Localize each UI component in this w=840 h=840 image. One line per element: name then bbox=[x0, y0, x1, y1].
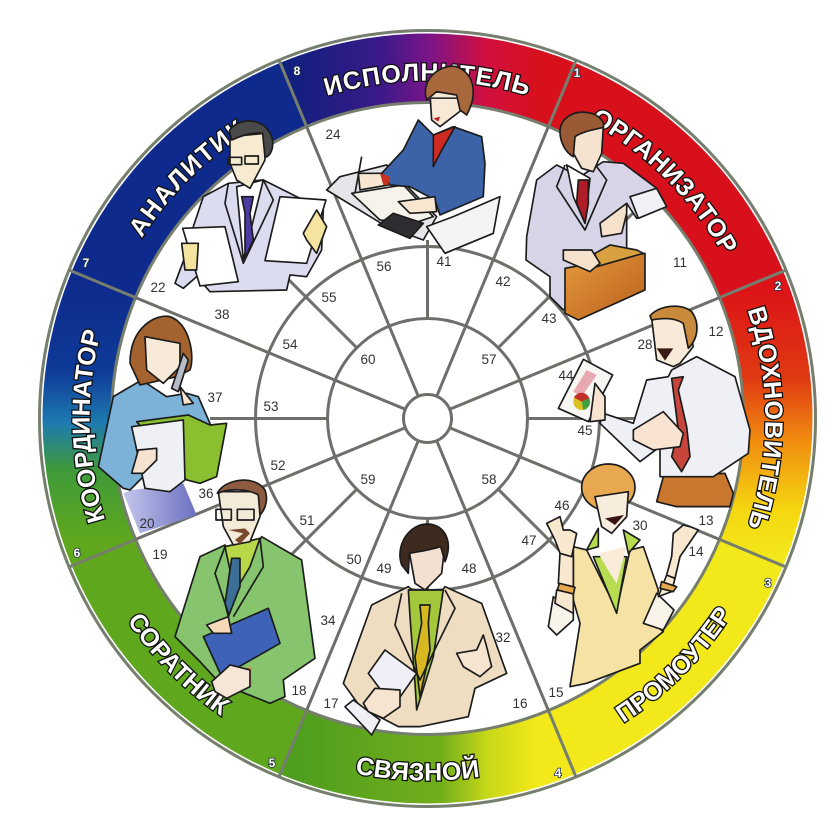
figure: woman at desk in blue jacket bbox=[327, 66, 500, 253]
cell numbers: 20 bbox=[139, 516, 155, 531]
cell numbers: 32 bbox=[495, 630, 511, 645]
segment: Аналитик bbox=[72, 63, 307, 298]
role title: ПРОМОУТЕР: ПРОМОУТЕР bbox=[613, 606, 728, 724]
cell numbers: 45 bbox=[577, 423, 593, 438]
cell numbers: 47 bbox=[521, 533, 537, 548]
segment numbers 1 to 8: 2 bbox=[775, 279, 782, 293]
cell numbers: 41 bbox=[436, 254, 452, 269]
target grid: circles and spokes bbox=[136, 127, 719, 710]
cell numbers: 36 bbox=[198, 486, 214, 501]
figure: woman with raised hands in yellow blazer bbox=[547, 464, 698, 687]
cell numbers: 13 bbox=[698, 513, 714, 528]
segment numbers 1 to 8 bbox=[74, 64, 782, 780]
segment: Связной bbox=[280, 710, 575, 803]
segment numbers 1 to 8: 6 bbox=[74, 546, 81, 560]
role title: КООРДИНАТОР: КООРДИНАТОР bbox=[71, 328, 106, 525]
role title: СОРАТНИК: СОРАТНИК bbox=[129, 613, 234, 718]
cell numbers: 53 bbox=[263, 399, 279, 414]
segment numbers 1 to 8: 4 bbox=[555, 766, 562, 780]
cell numbers: 50 bbox=[346, 552, 362, 567]
cell numbers: 54 bbox=[282, 337, 298, 352]
cell numbers: 57 bbox=[481, 352, 497, 367]
segment: Координатор bbox=[43, 271, 136, 566]
figure: man with briefcase in lavender suit bbox=[526, 112, 667, 320]
cell numbers: 55 bbox=[321, 290, 337, 305]
cell numbers: 19 bbox=[152, 547, 168, 562]
segment: Промоутер bbox=[548, 539, 783, 774]
figure: analyst in lavender suit with two sheets bbox=[175, 121, 327, 292]
cell numbers: 22 bbox=[150, 280, 166, 295]
figure: man in green jacket with blue folder bbox=[175, 480, 315, 703]
segment numbers 1 to 8: 7 bbox=[83, 256, 90, 270]
cell numbers: 44 bbox=[558, 368, 574, 383]
cell numbers: 16 bbox=[512, 696, 528, 711]
cell numbers: 42 bbox=[495, 274, 511, 289]
cell numbers: 34 bbox=[320, 613, 336, 628]
role title: АНАЛИТИК: АНАЛИТИК bbox=[130, 117, 238, 240]
role title: ВДОХНОВИТЕЛЬ: ВДОХНОВИТЕЛЬ bbox=[746, 304, 784, 529]
segment numbers 1 to 8: 3 bbox=[765, 576, 772, 590]
cell numbers: 56 bbox=[376, 259, 392, 274]
cell numbers: 58 bbox=[481, 472, 497, 487]
cell numbers: 46 bbox=[554, 498, 570, 513]
segment numbers 1 to 8: 8 bbox=[294, 64, 301, 78]
cell numbers: 48 bbox=[461, 561, 477, 576]
segment numbers 1 to 8: 1 bbox=[574, 66, 581, 80]
role title: ИСПОЛНИТЕЛЬ: ИСПОЛНИТЕЛЬ bbox=[322, 62, 530, 97]
cell numbers: 14 bbox=[688, 544, 704, 559]
cell numbers: 43 bbox=[541, 311, 557, 326]
segment: Соратник bbox=[72, 539, 307, 774]
cell numbers: 30 bbox=[632, 518, 648, 533]
cell numbers: 15 bbox=[548, 685, 564, 700]
cell numbers: 59 bbox=[360, 472, 376, 487]
cell numbers: 18 bbox=[291, 683, 307, 698]
cell numbers: 49 bbox=[376, 561, 392, 576]
role title: СВЯЗНОЙ: СВЯЗНОЙ bbox=[356, 753, 480, 782]
segment: Вдохновитель bbox=[719, 271, 812, 566]
cell numbers bbox=[139, 127, 724, 711]
cell numbers: 37 bbox=[207, 390, 223, 405]
segment: Исполнитель bbox=[280, 34, 575, 127]
segment numbers 1 to 8: 5 bbox=[269, 756, 276, 770]
cell numbers: 11 bbox=[673, 255, 687, 270]
segment: Организатор bbox=[548, 63, 783, 298]
cell numbers: 24 bbox=[325, 127, 341, 142]
figure: laughing man with chart card bbox=[558, 306, 750, 507]
figure: man in beige jacket with papers bbox=[343, 524, 507, 735]
cell numbers: 12 bbox=[708, 324, 724, 339]
figure: woman on phone in light blue blouse bbox=[98, 316, 227, 533]
cell numbers: 51 bbox=[299, 513, 315, 528]
role title: ОРГАНИЗАТОР: ОРГАНИЗАТОР bbox=[594, 109, 738, 251]
cell numbers: 28 bbox=[637, 337, 653, 352]
cell numbers: 17 bbox=[323, 696, 339, 711]
cell numbers: 52 bbox=[270, 458, 286, 473]
cell numbers: 38 bbox=[214, 307, 230, 322]
cell numbers: 60 bbox=[360, 352, 376, 367]
